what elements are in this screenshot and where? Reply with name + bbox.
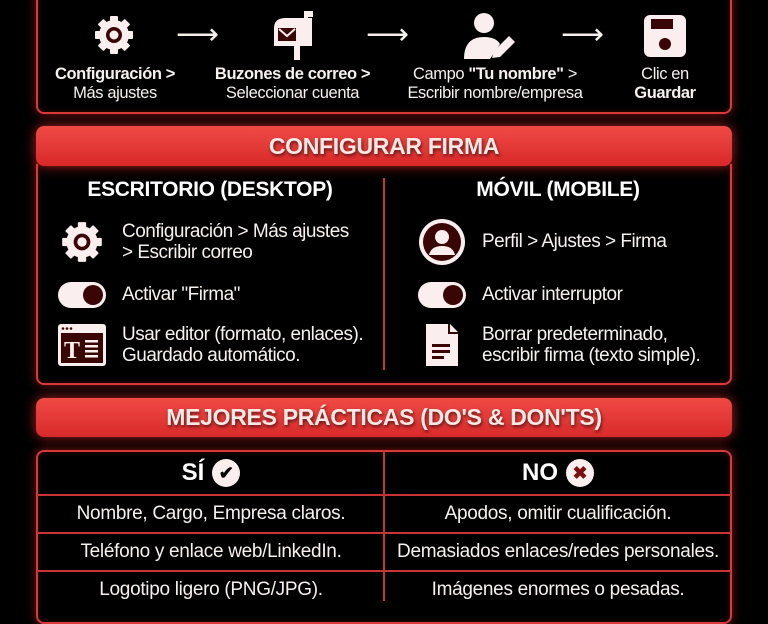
heading: si: SÍ bbox=[182, 459, 204, 486]
heading: no: ✖ bbox=[572, 463, 588, 483]
text: desktop 1 bbox=[122, 221, 349, 263]
text: step 1: Configuración > bbox=[55, 65, 175, 83]
heading: mejores practicas bbox=[36, 398, 732, 437]
text: desktop 1: Configuración > Más ajustes bbox=[122, 221, 349, 242]
heading: desktop: ESCRITORIO (DESKTOP) bbox=[87, 178, 333, 201]
heading: si: ✔ bbox=[219, 463, 234, 483]
text: Apodos, omitir cualificación. bbox=[445, 503, 671, 524]
panel: configurar firma bbox=[36, 164, 732, 385]
icon: floppy save bbox=[644, 15, 686, 57]
heading: configurar firma: CONFIGURAR FIRMA bbox=[269, 133, 499, 159]
text: mobile 3: escribir firma (texto simple). bbox=[482, 345, 700, 366]
text: step 2: Buzones de correo > bbox=[215, 65, 370, 83]
text: Demasiados enlaces/redes personales. bbox=[397, 541, 719, 562]
row 1: Nombre, Cargo, Empresa claros. bbox=[77, 503, 345, 524]
text: desktop 3: Usar editor (formato, enlaces). bbox=[122, 324, 363, 345]
heading: si bbox=[182, 458, 240, 487]
icon: profile bbox=[419, 219, 465, 265]
icon: editor: T bbox=[64, 338, 80, 364]
text: Imágenes enormes o pesadas. bbox=[432, 579, 684, 600]
text: desktop 3 bbox=[122, 324, 363, 366]
arrow: ⟶ bbox=[366, 18, 409, 51]
text: step 1 bbox=[55, 65, 175, 102]
table: do's and don'ts bbox=[36, 450, 732, 624]
text: step 4 bbox=[634, 65, 696, 102]
icon: gear small bbox=[62, 222, 102, 262]
text: desktop 3: Guardado automático. bbox=[122, 345, 300, 366]
text: mobile 3: Borrar predeterminado, bbox=[482, 324, 667, 345]
icon: document bbox=[426, 324, 458, 366]
text: step 2 bbox=[215, 65, 370, 102]
text: mobile 3 bbox=[482, 324, 700, 366]
text: step 2: Seleccionar cuenta bbox=[226, 84, 359, 102]
row 3: Logotipo ligero (PNG/JPG). bbox=[99, 579, 323, 600]
text: step 3: Campo "Tu nombre" > bbox=[413, 65, 577, 83]
panel: steps bbox=[36, 0, 732, 114]
text: step 1: Más ajustes bbox=[73, 84, 157, 102]
arrow: ⟶ bbox=[176, 18, 219, 51]
icon: gear bbox=[95, 16, 133, 54]
text: mobile 2: Activar interruptor bbox=[482, 284, 622, 305]
text: step 4: Clic en bbox=[641, 65, 689, 83]
icon: user with pencil bbox=[464, 13, 515, 59]
text: desktop 1: > Escribir correo bbox=[122, 242, 252, 263]
row 2: Teléfono y enlace web/LinkedIn. bbox=[80, 541, 342, 562]
heading: configurar firma bbox=[36, 126, 732, 166]
icon: editor bbox=[58, 324, 106, 366]
text: mobile 1: Perfil > Ajustes > Firma bbox=[482, 231, 666, 252]
heading: no bbox=[522, 459, 594, 487]
text: step 4: Guardar bbox=[634, 84, 696, 102]
arrow: ⟶ bbox=[561, 18, 604, 51]
icon: toggle mobile bbox=[418, 282, 466, 308]
text: desktop 2: Activar "Firma" bbox=[122, 284, 240, 305]
heading: mobile: MÓVIL (MOBILE) bbox=[476, 178, 640, 201]
icon: toggle bbox=[58, 282, 106, 308]
text: step 3: Escribir nombre/empresa bbox=[407, 84, 583, 102]
heading: no: NO bbox=[522, 459, 558, 486]
text: step 3 bbox=[407, 65, 583, 102]
icon: mailbox bbox=[274, 11, 313, 60]
heading: mejores practicas: MEJORES PRÁCTICAS (DO'S & DON'TS) bbox=[166, 404, 602, 430]
